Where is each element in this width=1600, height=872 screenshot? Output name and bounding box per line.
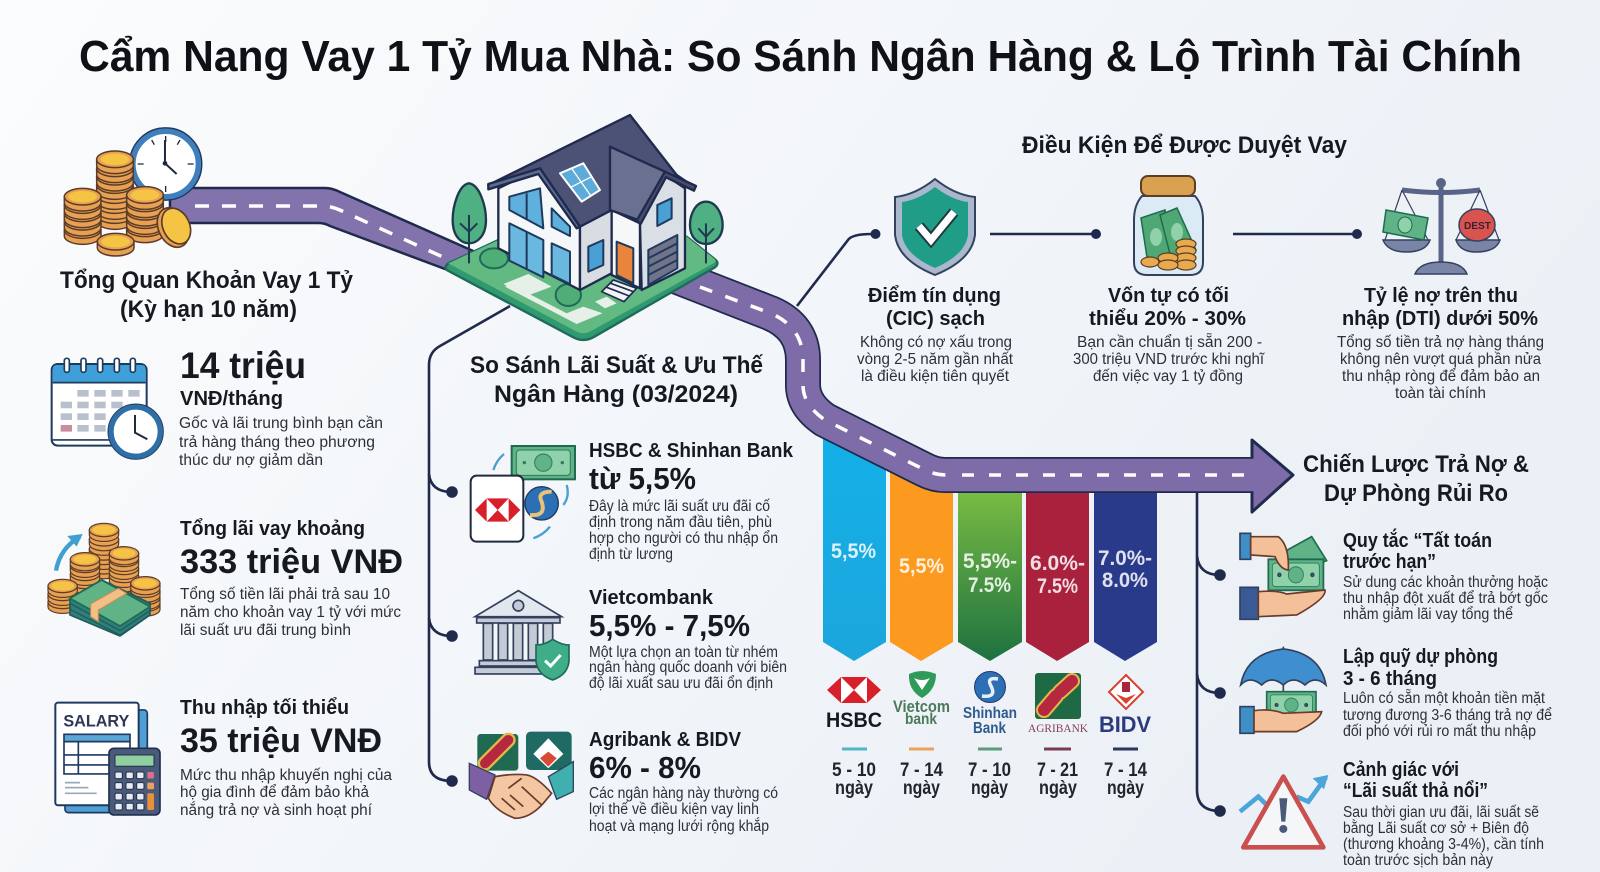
road: purple path with arrow	[170, 188, 1293, 512]
condition: credit score: vòng 2-5 năm gần nhất	[857, 351, 1014, 368]
strategy: early settlement	[1343, 528, 1548, 623]
bank: Vietcombank	[589, 587, 787, 692]
logo: Shinhan Bank: Bank	[973, 720, 1006, 737]
heading: loan overview: (Kỳ hạn 10 năm)	[120, 296, 297, 323]
icon: bank building and shield	[475, 591, 569, 680]
icon: salary sheet and calculator	[55, 703, 160, 815]
roof	[488, 115, 696, 228]
strategy: early settlement: Sử dung các khoản thưởng hoặc	[1343, 574, 1548, 591]
stat: total interest: năm cho khoản vay 1 tỷ với mức	[180, 604, 401, 621]
icon: shield	[895, 179, 975, 275]
processing days: Shinhan: ngày	[971, 778, 1008, 799]
stat: monthly payment: Gốc và lãi trung bình bạn cần	[179, 415, 383, 432]
stat: minimum income: hộ gia đình để đảm bảo khả	[180, 784, 369, 801]
logo: BIDV	[1099, 675, 1151, 737]
stat: total interest: lãi suất ưu đãi trung bình	[180, 622, 351, 639]
stat: total interest: Tổng lãi vay khoảng	[180, 518, 365, 540]
stat: monthly payment: 14 triệu	[180, 345, 306, 386]
condition: own capital: Vốn tự có tối	[1108, 285, 1229, 307]
stat: monthly payment: thúc dư nợ giảm dần	[179, 452, 323, 469]
bushes	[480, 248, 581, 306]
bank: Agribank and BIDV: Agribank & BIDV	[589, 729, 742, 751]
bank: HSBC and Shinhan: Đây là mức lãi suất ưu đãi cố	[589, 498, 770, 515]
icon: balance scale: DEST	[1464, 220, 1492, 232]
condition: credit score: Không có nợ xấu trong	[860, 334, 1012, 351]
condition: DTI: thu nhập ròng để đảm bảo an	[1342, 368, 1540, 385]
bank: HSBC and Shinhan	[589, 440, 794, 563]
condition: DTI: Tỷ lệ nợ trên thu	[1364, 285, 1518, 307]
stat: total interest	[180, 518, 403, 639]
processing days: HSBC	[832, 748, 876, 799]
heading: approval conditions: Điều Kiện Để Được Duyệt Vay	[1022, 132, 1348, 159]
icon: coin stacks and cash	[48, 523, 160, 636]
bar: BIDV 7.0%-8.0%	[1094, 480, 1157, 661]
bar: BIDV 7.0%-8.0%: 8.0%	[1102, 569, 1148, 592]
logo: Shinhan Bank: Shinhan	[963, 705, 1017, 722]
logo: BIDV: BIDV	[1099, 712, 1151, 737]
logo: HSBC	[826, 677, 882, 732]
stat: minimum income: 35 triệu VNĐ	[180, 722, 382, 760]
stat: minimum income: Mức thu nhập khuyến nghị của	[180, 767, 392, 784]
strategy: floating rate warning: Cảnh giác với	[1343, 759, 1459, 781]
stat: monthly payment: VNĐ/tháng	[180, 388, 283, 410]
heading: rate comparison	[470, 352, 764, 408]
connector: approval conditions branch	[797, 229, 1362, 306]
bank: HSBC and Shinhan: hợp cho người có thu nhập ổn	[589, 530, 778, 547]
bank: Vietcombank: độ lãi xuất sau ưu đãi ổn định	[589, 675, 773, 692]
bar: Agribank 6.0%-7.5%: 6.0%-	[1030, 552, 1085, 575]
bank: HSBC and Shinhan: HSBC & Shinhan Bank	[589, 440, 794, 462]
processing days: Vietcombank: 7 - 14	[900, 760, 943, 781]
condition: own capital: 300 triệu VND trước khi nghĩ	[1073, 351, 1265, 368]
bar: Shinhan 5,5%-7.5%: 7.5%	[968, 574, 1011, 597]
processing days: HSBC: 5 - 10	[832, 760, 876, 781]
bank: Agribank and BIDV: Các ngân hàng này thường có	[589, 785, 778, 802]
bar: BIDV 7.0%-8.0%: 7.0%-	[1098, 547, 1152, 570]
condition: DTI: Tổng số tiền trả nợ hàng tháng	[1337, 334, 1544, 351]
logo: HSBC: HSBC	[826, 709, 882, 732]
steps	[602, 280, 637, 302]
processing days: Shinhan: 7 - 10	[968, 760, 1011, 781]
heading: repayment strategy	[1303, 451, 1529, 507]
strategy: emergency fund: Lập quỹ dự phòng	[1343, 646, 1498, 668]
logo: Vietcombank: Vietcom	[893, 697, 950, 716]
condition: own capital: đến việc vay 1 tỷ đồng	[1093, 368, 1243, 385]
icon: money jar	[1134, 176, 1203, 275]
processing days: Shinhan	[968, 748, 1011, 799]
strategy: early settlement: nhằm giảm lãi vay tổng thể	[1343, 606, 1513, 623]
bank: Vietcombank: Một lựa chọn an toàn từ nhém	[589, 644, 778, 661]
title: Cẩm Nang Vay 1 Tỷ Mua Nhà: So Sánh Ngân Hàng & Lộ Trình Tài Chính	[79, 32, 1522, 81]
strategy: floating rate warning: (thương khoảng 3-4%), cần tính	[1343, 836, 1544, 853]
bank: HSBC and Shinhan: từ 5,5%	[589, 461, 696, 496]
bar: Shinhan 5,5%-7.5%: 5,5%-	[963, 550, 1017, 573]
bank: HSBC and Shinhan: định từ lương	[589, 546, 673, 563]
icon: balance scale	[1383, 178, 1500, 274]
strategy: emergency fund: tương đương 3-6 tháng trả nợ để	[1343, 707, 1552, 724]
strategy: early settlement: trước hạn”	[1343, 551, 1436, 573]
coin stacks	[64, 151, 197, 256]
heading: rate comparison: So Sánh Lãi Suất & Ưu Thế	[470, 352, 764, 379]
condition: credit score: Điểm tín dụng	[868, 285, 1001, 307]
stat: minimum income	[180, 697, 392, 819]
stat: minimum income: Thu nhập tối thiểu	[180, 697, 349, 719]
connector: strategy branch	[1197, 490, 1224, 816]
processing days: HSBC: ngày	[835, 778, 873, 799]
condition: DTI	[1337, 178, 1544, 402]
logo: Vietcombank: bank	[905, 711, 937, 728]
strategy: early settlement: thu nhập đột xuất để trả bớt gốc	[1343, 590, 1548, 607]
strategy: emergency fund: Luôn có sẵn một khoản tiền mặt	[1343, 690, 1546, 707]
logo: Shinhan Bank	[963, 672, 1017, 737]
connector: bank comparison branch	[429, 306, 510, 786]
bank: Agribank and BIDV	[589, 729, 778, 835]
strategy: emergency fund: 3 - 6 tháng	[1343, 668, 1437, 690]
processing days: BIDV: ngày	[1107, 778, 1144, 799]
bar: Vietcombank 5,5%: 5,5%	[899, 555, 944, 578]
bank: Vietcombank: ngân hàng quốc doanh với biên	[589, 659, 787, 676]
condition: credit score	[857, 179, 1014, 385]
icon: coins and clock	[64, 128, 202, 256]
walls	[498, 168, 685, 290]
bank: Agribank and BIDV: hoạt và mạng lưới rộng khắp	[589, 818, 769, 835]
icon: salary sheet and calculator: SALARY	[63, 712, 129, 731]
heading: loan overview: Tổng Quan Khoản Vay 1 Tỷ	[60, 267, 354, 294]
solar panel	[560, 163, 600, 202]
left tree	[453, 183, 486, 263]
bank: Vietcombank: 5,5% - 7,5%	[589, 608, 750, 643]
bar: Agribank 6.0%-7.5%: 7.5%	[1037, 575, 1078, 598]
windows and doors	[509, 188, 677, 285]
condition: own capital	[1073, 176, 1265, 385]
bank: Agribank and BIDV: 6% - 8%	[589, 750, 701, 785]
bar: Agribank 6.0%-7.5%	[1026, 480, 1089, 661]
bar: HSBC 5,5%: 5,5%	[831, 540, 876, 563]
strategy: floating rate warning: toàn trước sịch bản này	[1343, 852, 1493, 869]
icon: hands with money	[1240, 533, 1327, 619]
condition: DTI: không nên vượt quá phần nửa	[1340, 351, 1541, 368]
condition: credit score: (CIC) sạch	[886, 308, 985, 330]
bank: Vietcombank: Vietcombank	[589, 587, 714, 609]
icon: warning triangle with rising arrow	[1240, 775, 1328, 847]
icon: umbrella over money	[1240, 647, 1326, 733]
condition: own capital: Bạn cần chuẩn tị sẵn 200 -	[1077, 334, 1262, 351]
logo: Vietcombank	[893, 671, 950, 728]
bar: HSBC 5,5%	[823, 430, 886, 661]
logo: Agribank	[1028, 673, 1088, 735]
heading: rate comparison: Ngân Hàng (03/2024)	[494, 381, 738, 408]
strategy: floating rate warning: Sau thời gian ưu đãi, lãi suất sẽ	[1343, 804, 1539, 821]
heading: loan overview	[60, 267, 354, 323]
strategy: floating rate warning: bằng Lãi suất cơ sở + Biên độ	[1343, 820, 1529, 837]
icon: handshake with bank logos	[469, 732, 573, 818]
logo: Agribank: AGRIBANK	[1028, 721, 1088, 735]
bar: Shinhan 5,5%-7.5%	[958, 480, 1022, 661]
strategy: emergency fund: đối phó với rủi ro mất thu nhập	[1343, 723, 1536, 740]
heading: repayment strategy: Chiến Lược Trả Nợ &	[1303, 451, 1529, 478]
stat: monthly payment	[179, 345, 383, 469]
stat: minimum income: nắng trả nợ và sinh hoạt phí	[180, 802, 373, 819]
condition: DTI: toàn tài chính	[1395, 385, 1486, 402]
strategy: floating rate warning	[1343, 759, 1544, 869]
condition: DTI: nhập (DTI) dưới 50%	[1342, 308, 1538, 330]
bank: Agribank and BIDV: lợi thế về điều kiện vay linh	[589, 801, 759, 818]
right tree	[690, 202, 723, 263]
stat: total interest: Tổng số tiền lãi phải trả sau 10	[180, 586, 390, 603]
icon: house on green plot	[446, 115, 723, 340]
strategy: early settlement: Quy tắc “Tất toán	[1343, 528, 1492, 552]
clock	[130, 128, 202, 200]
processing days: Vietcombank	[900, 748, 943, 799]
stat: monthly payment: trả hàng tháng theo phương	[179, 434, 375, 451]
processing days: BIDV	[1104, 748, 1147, 799]
bank: HSBC and Shinhan: định trong năm đầu tiên, phù	[589, 514, 772, 531]
condition: credit score: là điều kiện tiên quyết	[861, 368, 1010, 385]
processing days: Agribank	[1037, 748, 1078, 799]
processing days: Agribank: 7 - 21	[1037, 760, 1078, 781]
strategy: emergency fund	[1343, 646, 1552, 740]
strategy: floating rate warning: “Lãi suất thả nổi”	[1343, 780, 1488, 802]
processing days: Agribank: ngày	[1039, 778, 1077, 799]
processing days: Vietcombank: ngày	[903, 778, 940, 799]
bar: Vietcombank 5,5%	[890, 462, 953, 661]
icon: HSBC and Shinhan	[471, 446, 575, 542]
heading: repayment strategy: Dự Phòng Rủi Ro	[1324, 480, 1508, 507]
processing days: BIDV: 7 - 14	[1104, 760, 1147, 781]
chart: interest rate ribbons	[823, 430, 1157, 661]
condition: own capital: thiểu 20% - 30%	[1089, 308, 1246, 330]
icon: calendar and clock	[52, 358, 163, 459]
stat: total interest: 333 triệu VNĐ	[180, 543, 403, 581]
green plot	[446, 230, 717, 340]
